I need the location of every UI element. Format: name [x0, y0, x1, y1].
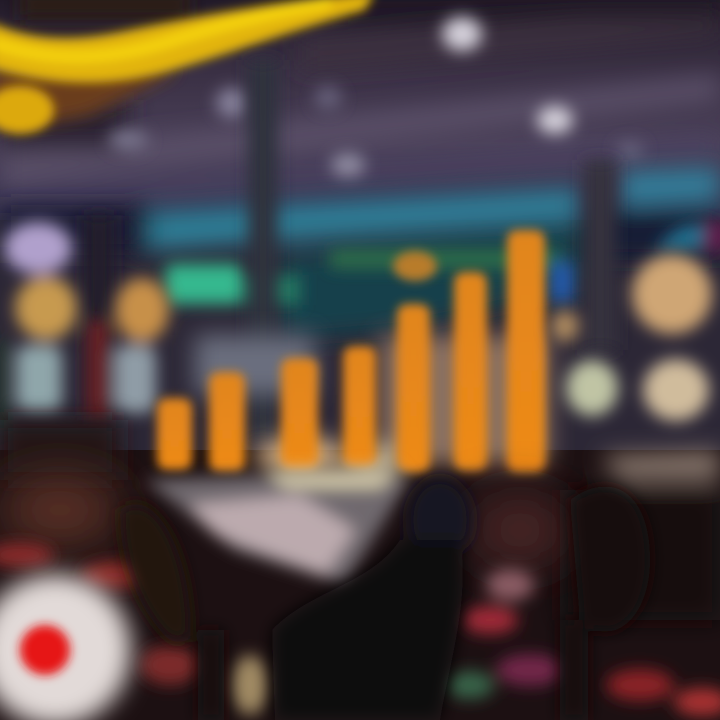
pillars — [84, 60, 616, 440]
slot console — [145, 468, 410, 585]
bar chart — [157, 230, 545, 472]
background: ceiling — [0, 0, 720, 240]
bar 4 — [343, 346, 376, 468]
teal band — [0, 168, 720, 340]
bar 6 — [454, 272, 487, 470]
silhouette: person — [272, 478, 472, 720]
chip center — [20, 625, 70, 675]
ceiling stripes — [0, 0, 720, 210]
pale machines behind bars — [195, 335, 550, 478]
bar 2 — [209, 372, 245, 472]
bar 5 — [397, 304, 430, 472]
background: floor — [0, 450, 720, 720]
chip body — [0, 574, 131, 720]
floor warm tones — [0, 476, 570, 564]
bar 7 — [507, 230, 545, 472]
icon: poker chip — [0, 574, 131, 720]
icon: multicolor wheel top right — [655, 219, 720, 253]
glow under yellow arc — [0, 0, 190, 125]
green sign — [165, 250, 574, 305]
bar 3 — [281, 358, 318, 470]
silhouette: right figure — [560, 486, 650, 720]
silhouette: left figure — [120, 504, 224, 720]
bar 5 cap — [393, 251, 437, 281]
icon: ceiling lights — [108, 17, 644, 177]
carpet speckles — [0, 543, 720, 716]
bar 1 — [157, 398, 192, 470]
background: middle wall — [0, 220, 720, 460]
right dark machines — [0, 420, 720, 620]
yellow ceiling arc — [0, 0, 375, 134]
left wall glow and lamps — [0, 222, 169, 430]
right lamps — [551, 254, 712, 421]
